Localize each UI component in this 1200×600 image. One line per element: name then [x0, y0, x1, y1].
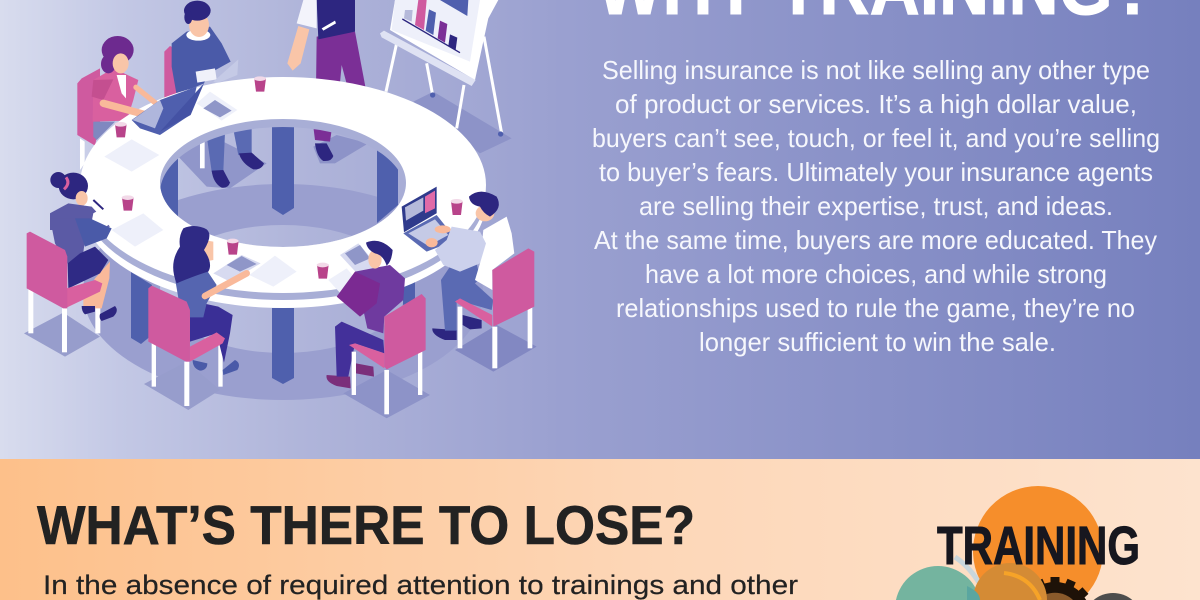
person: man in white shirt with laptop, right: [402, 187, 537, 372]
presenter legs seen through the hole: [313, 127, 368, 163]
text block: why training body copy: buyers can’t see, touch, or feel it, and you’re selling: [592, 123, 1160, 153]
text block: why training body copy: relationships used to rule the game, they’re no: [616, 293, 1135, 323]
text block: why training body copy: to buyer’s fears. Ultimately your insurance agents: [599, 157, 1153, 187]
person: woman with bun, left: [24, 172, 119, 357]
person: presenter standing: [287, 0, 366, 90]
columns of the table: [131, 125, 415, 384]
heading: what's there to lose: WHAT’S THERE TO LOSE?: [37, 494, 695, 556]
panel: what's there to lose background: [0, 459, 1200, 600]
text block: why training body copy: [592, 55, 1160, 357]
person: man in purple, front right: [326, 241, 430, 418]
ring table: [80, 77, 486, 308]
text block: why training body copy: are selling their expertise, trust, and ideas.: [639, 191, 1113, 221]
text block: why training body copy: have a lot more choices, and while strong: [645, 259, 1107, 289]
text block: why training body copy: Selling insurance is not like selling any other type: [602, 55, 1150, 85]
title: training: TRAINING: [937, 516, 1140, 576]
laptop and arms of woman in pink: [103, 83, 204, 135]
text block: why training body copy: of product or services. It’s a high dollar value,: [615, 89, 1137, 119]
illustration: team meeting around ring table: [24, 0, 537, 418]
person: man in blue sweater with tablet: [164, 1, 238, 100]
panel: why training background: [0, 0, 1200, 459]
seated man legs seen through the hole: [178, 127, 267, 188]
person: woman in pink, body behind the table: [77, 36, 138, 170]
floor shadow of ring table: [83, 184, 483, 400]
icon: training circles and gear: [896, 486, 1140, 600]
text block: why training body copy: longer sufficient to win the sale.: [699, 327, 1056, 357]
person: woman with long hair, front: [144, 226, 247, 410]
table items: cups, papers and notebooks: [104, 76, 463, 298]
text block: why training body copy: At the same time, buyers are more educated. They: [594, 225, 1157, 255]
flipchart with bar chart: [380, 0, 512, 153]
text block: what's there to lose intro: In the absence of required attention to trainings and other: [43, 570, 798, 600]
